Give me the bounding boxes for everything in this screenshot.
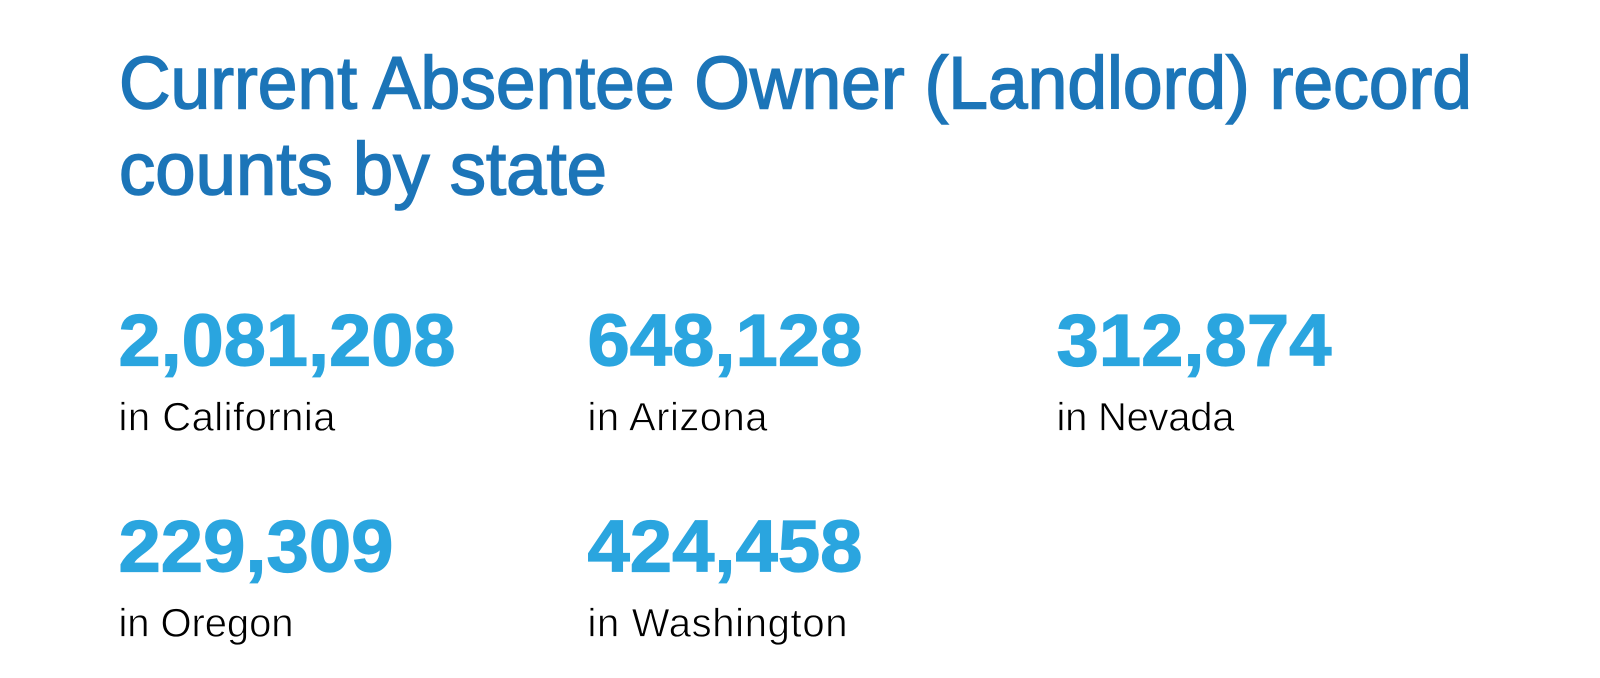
title: counts by state	[119, 128, 607, 210]
stat: Nevada: in Nevada	[1056, 396, 1235, 440]
stat: Washington	[588, 506, 862, 646]
stat: Arizona: in Arizona	[588, 396, 768, 440]
stat: Oregon	[118, 506, 394, 646]
stat: Washington: in Washington	[588, 602, 848, 646]
stat: Washington: 424,458	[588, 506, 862, 588]
stat: Oregon: 229,309	[118, 506, 394, 588]
stat: Arizona: 648,128	[588, 300, 862, 382]
stat: California	[118, 300, 456, 440]
title	[119, 42, 1472, 210]
stat: Nevada: 312,874	[1056, 300, 1332, 382]
stat: Nevada	[1056, 300, 1332, 440]
stat: California: 2,081,208	[118, 300, 456, 382]
stat: Oregon: in Oregon	[118, 602, 294, 646]
stat: Arizona	[588, 300, 862, 440]
stat: California: in California	[118, 396, 336, 440]
title: Current Absentee Owner (Landlord) record	[119, 42, 1472, 124]
